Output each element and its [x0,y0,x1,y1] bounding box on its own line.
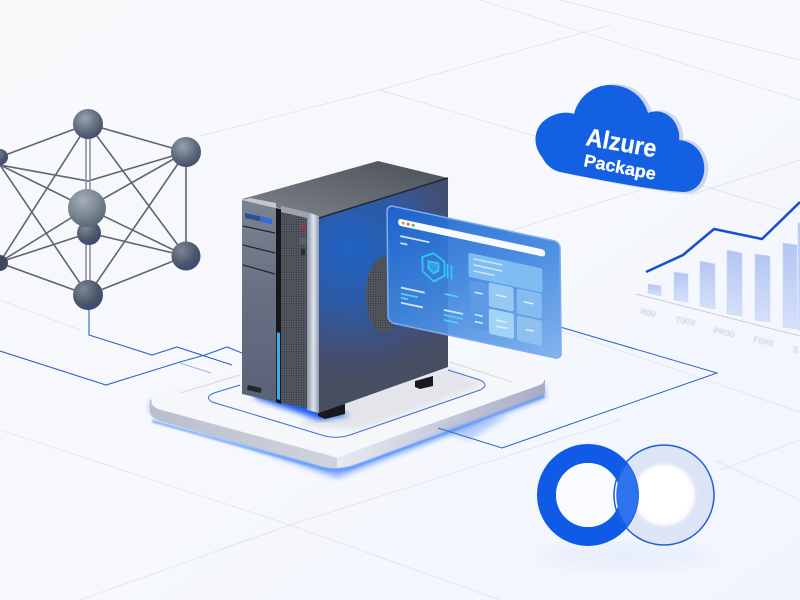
button grid [470,280,488,307]
platform inner trace [208,370,485,437]
server side vent [366,257,402,333]
server tower [242,161,448,420]
cloud badge [536,84,708,194]
platform top [151,340,544,455]
browser bar [398,218,545,257]
server led bar [277,332,280,400]
platform edge [150,380,545,468]
bar and line chart [636,202,800,355]
server silver edge [307,212,319,413]
panel glass [387,205,561,359]
cloud label: Packape [582,150,658,184]
server feet [415,376,433,389]
axis labels: T00X [675,314,697,328]
server status strip [245,213,272,224]
trend line [646,202,800,272]
axis labels: R00 [640,306,657,319]
axis labels [640,306,800,355]
server front [242,200,276,402]
shield hex icon [422,251,452,285]
cloud label: Alzure [584,123,659,163]
axis labels: S [792,344,800,355]
server mesh panel [281,211,307,408]
server badge [247,385,262,393]
info card [468,253,543,293]
chart axis [636,294,800,336]
text lines [400,236,463,316]
chart bars [648,223,800,330]
cloud depth [540,84,708,194]
network: connection traces [0,305,242,385]
server side [319,178,448,413]
glass ring outline [614,445,714,545]
solid ring [546,454,630,536]
server top [242,161,448,218]
platform glow [150,386,545,478]
trace to right [438,327,717,448]
glass ring [624,455,704,535]
platform [150,340,545,478]
axis labels: PR00 [713,325,736,339]
floating dashboard panel [387,205,561,359]
cloud label [582,123,659,184]
ring reflection [540,544,710,568]
overlapping rings [540,445,714,568]
axis labels: F0X0 [753,334,775,348]
ring overlap [616,464,639,526]
cloud body [536,85,704,192]
server underglow [255,390,350,420]
icon: molecular network [0,109,201,310]
